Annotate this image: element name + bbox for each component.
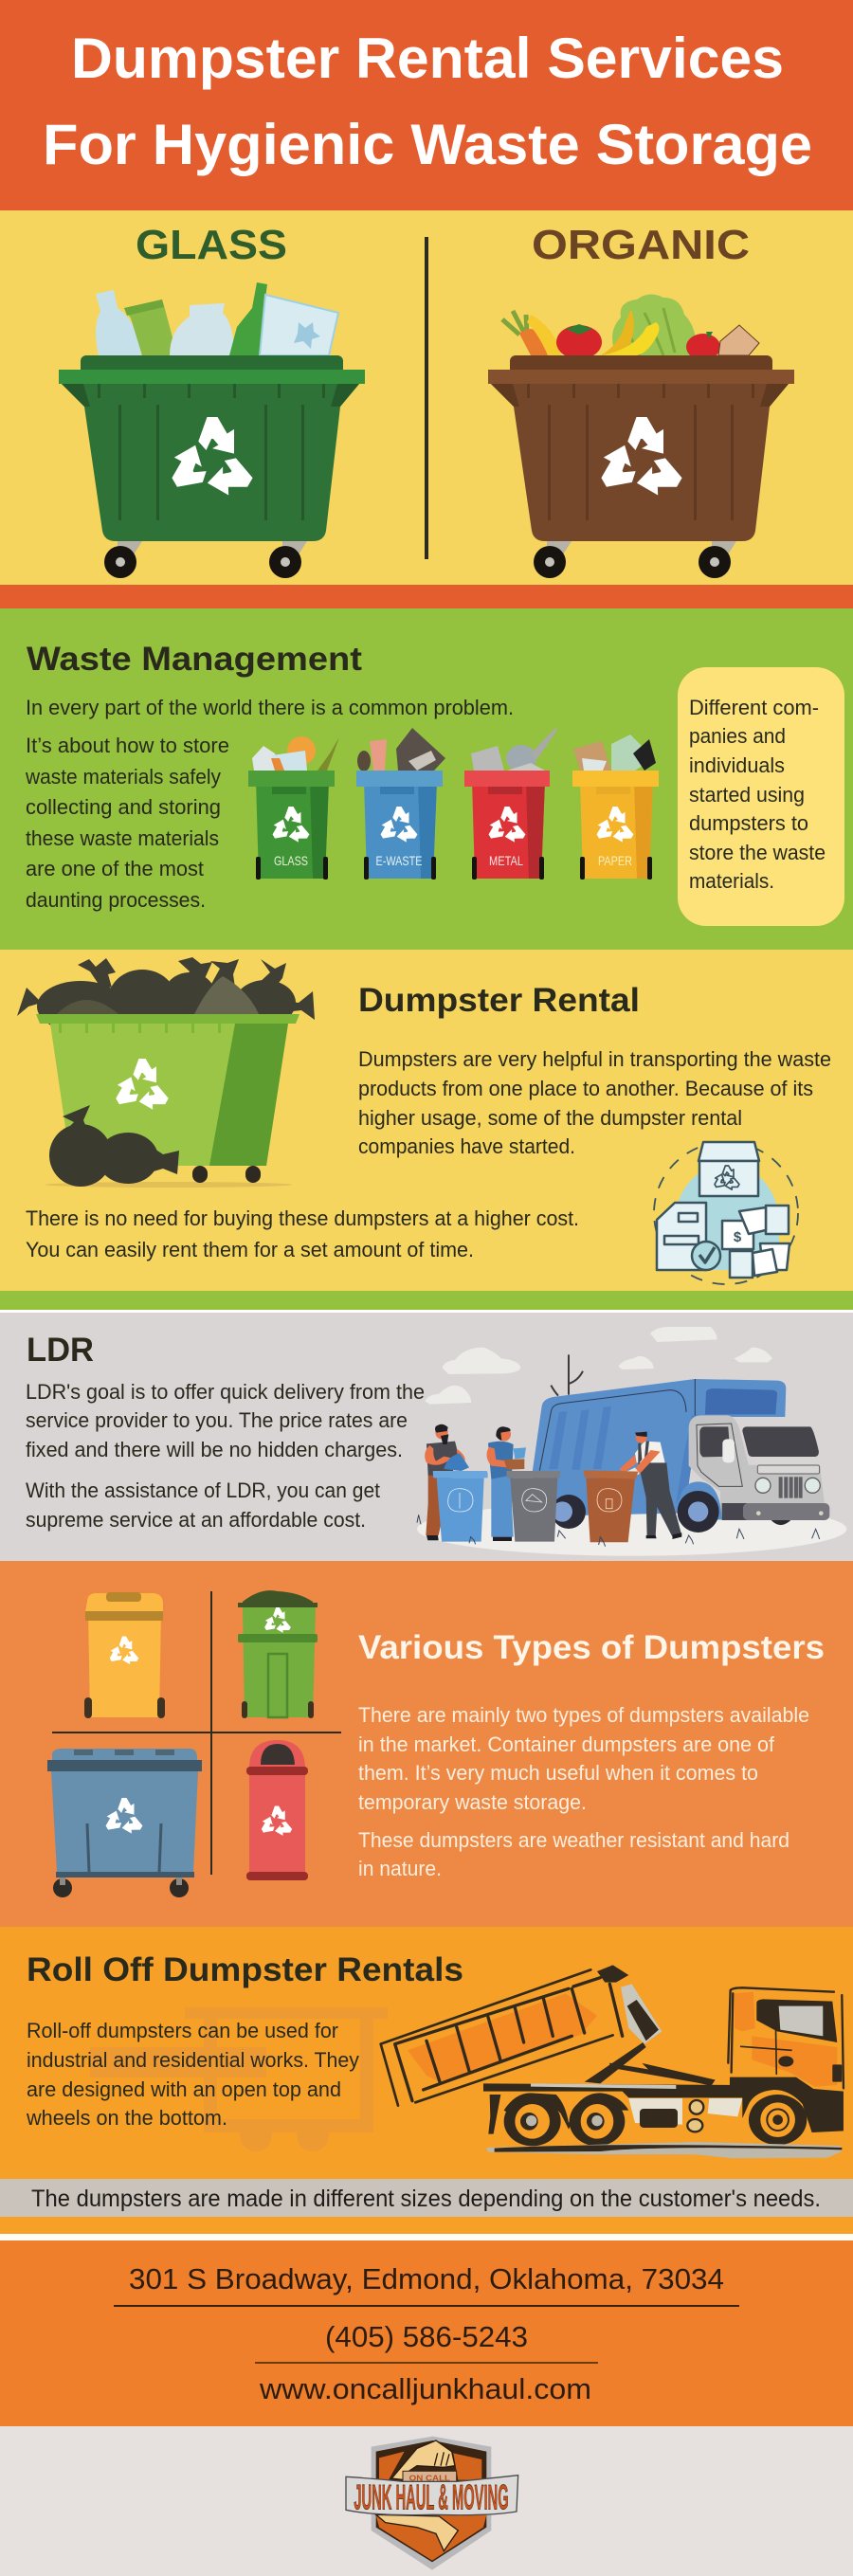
text block: roll off bbox=[26, 2019, 359, 2130]
illustration: truck and workers bbox=[417, 1327, 846, 1556]
panel: waste management bbox=[0, 608, 853, 950]
person 2 bbox=[491, 1476, 514, 1537]
text block: types: These dumpsters are weather resistant and hard bbox=[358, 1828, 789, 1852]
icon: rental service bbox=[654, 1142, 798, 1284]
icon: red metal wheelie bin: METAL bbox=[489, 853, 523, 868]
callout bbox=[678, 667, 844, 926]
illustration: roll-off truck bbox=[381, 1965, 844, 2158]
heading: Dumpster Rental bbox=[358, 982, 640, 1019]
person 1 bbox=[426, 1474, 452, 1535]
text block: rental: higher usage, some of the dumpster rental bbox=[358, 1106, 742, 1130]
text block: intro: It’s about how to store bbox=[26, 734, 229, 757]
callout: dumpsters to bbox=[689, 811, 808, 835]
icon: blue e-waste wheelie bin bbox=[356, 728, 445, 880]
person 3 bbox=[638, 1462, 681, 1538]
logo: ON CALL bbox=[409, 2473, 451, 2482]
text block: rent note bbox=[26, 1206, 579, 1261]
text block: types bbox=[358, 1703, 809, 1880]
text block: rental: products from one place to another. Because of its bbox=[358, 1077, 813, 1100]
text block: types: them. It’s very much useful when it comes to bbox=[358, 1761, 758, 1785]
text block: roll off: industrial and residential works. They bbox=[27, 2048, 359, 2072]
icon: organic waste items bbox=[502, 294, 759, 360]
text block: rental: Dumpsters are very helpful in transporting the waste bbox=[358, 1047, 831, 1071]
panel: LDR bbox=[0, 1313, 853, 1561]
icon: green bin bbox=[238, 1590, 318, 1718]
text block: roll off: are designed with an open top and bbox=[27, 2077, 341, 2101]
callout: panies and bbox=[689, 724, 786, 748]
text block: types: in the market. Container dumpsters are one of bbox=[358, 1732, 775, 1756]
text block: types: temporary waste storage. bbox=[358, 1790, 587, 1814]
panel: various types of dumpsters bbox=[0, 1561, 853, 1927]
icon: green glass bin bbox=[59, 355, 365, 578]
icon: rental service: $ bbox=[734, 1229, 742, 1245]
text block: rent note: You can easily rent them for a set amount of time. bbox=[26, 1238, 474, 1261]
title: Dumpster Rental Services bbox=[71, 27, 784, 90]
panel: logo footer: JUNK HAUL & MOVING bbox=[354, 2478, 509, 2517]
panel: dumpster rental bbox=[0, 950, 853, 1313]
icon: yellow paper wheelie bin: PAPER bbox=[598, 853, 632, 868]
title bbox=[43, 27, 812, 176]
icon: green glass wheelie bin bbox=[248, 736, 339, 880]
panel: glass vs organic bins bbox=[0, 210, 853, 608]
icon: blue container bbox=[47, 1749, 202, 1897]
phone: (405) 586-5243 bbox=[325, 2320, 528, 2353]
logo bbox=[346, 2437, 518, 2570]
panel: contact details bbox=[0, 2240, 853, 2426]
text block: LDR: supreme service at an affordable cost. bbox=[26, 1508, 366, 1532]
heading: Various Types of Dumpsters bbox=[358, 1629, 825, 1666]
banner: sizes note: The dumpsters are made in different sizes depending on the customer's needs. bbox=[31, 2186, 821, 2212]
bins bbox=[437, 1478, 484, 1542]
callout: materials. bbox=[689, 869, 774, 893]
website: www.oncalljunkhaul.com bbox=[259, 2372, 591, 2405]
callout: Different com- bbox=[689, 696, 819, 719]
text block: intro: waste materials safely bbox=[25, 765, 221, 789]
icon: blue e-waste wheelie bin: E-WASTE bbox=[375, 853, 423, 868]
icon: red bin bbox=[246, 1740, 308, 1880]
text block: LDR: LDR's goal is to offer quick delivery from the bbox=[26, 1380, 425, 1404]
title: For Hygienic Waste Storage bbox=[43, 113, 812, 176]
heading: Roll Off Dumpster Rentals bbox=[27, 1951, 463, 1988]
icon: green glass wheelie bin: GLASS bbox=[274, 853, 308, 868]
text block: LDR: service provider to you. The price rates are bbox=[26, 1408, 408, 1432]
text block: rental bbox=[358, 1047, 831, 1158]
address: 301 S Broadway, Edmond, Oklahoma, 73034 bbox=[129, 2262, 724, 2295]
text block: LDR bbox=[26, 1380, 425, 1532]
icon: glass waste items bbox=[96, 282, 338, 355]
callout: store the waste bbox=[689, 841, 826, 864]
text block: types: There are mainly two types of dumpsters available bbox=[358, 1703, 809, 1727]
panel: logo footer bbox=[0, 2426, 853, 2576]
text block: intro: are one of the most bbox=[26, 857, 204, 880]
header band bbox=[0, 0, 853, 210]
text block: intro: collecting and storing bbox=[26, 795, 221, 819]
text block: LDR: With the assistance of LDR, you can get bbox=[26, 1478, 380, 1502]
text block: roll off: Roll-off dumpsters can be used for bbox=[27, 2019, 338, 2042]
heading: glass: GLASS bbox=[136, 222, 287, 268]
text block: rent note: There is no need for buying these dumpsters at a higher cost. bbox=[26, 1206, 579, 1230]
icon: brown organic bin bbox=[488, 355, 794, 578]
ghost dumpster watermark bbox=[90, 2007, 388, 2151]
icon: red metal wheelie bin bbox=[464, 728, 557, 880]
heading: Waste Management bbox=[27, 641, 362, 678]
icon: dumpster with trash bags bbox=[17, 957, 315, 1188]
callout: started using bbox=[689, 783, 805, 807]
text block: roll off: wheels on the bottom. bbox=[26, 2106, 227, 2130]
banner: sizes note bbox=[0, 2179, 853, 2217]
icon: yellow paper wheelie bin bbox=[572, 735, 659, 880]
text block: intro: these waste materials bbox=[26, 826, 219, 850]
icon: yellow bin bbox=[84, 1592, 165, 1718]
plants bbox=[417, 1515, 820, 1547]
text block: types: in nature. bbox=[358, 1857, 442, 1880]
panel: roll off dumpster rentals bbox=[0, 1927, 853, 2240]
heading: LDR bbox=[27, 1332, 94, 1369]
text block: rental: companies have started. bbox=[358, 1134, 575, 1158]
text block: intro: daunting processes. bbox=[26, 888, 206, 912]
heading: organic: ORGANIC bbox=[532, 222, 750, 268]
text block: intro bbox=[25, 696, 514, 912]
text block: intro: In every part of the world there is a common problem. bbox=[26, 696, 514, 719]
text block: LDR: fixed and there will be no hidden charges. bbox=[26, 1438, 403, 1461]
callout: individuals bbox=[689, 753, 785, 777]
